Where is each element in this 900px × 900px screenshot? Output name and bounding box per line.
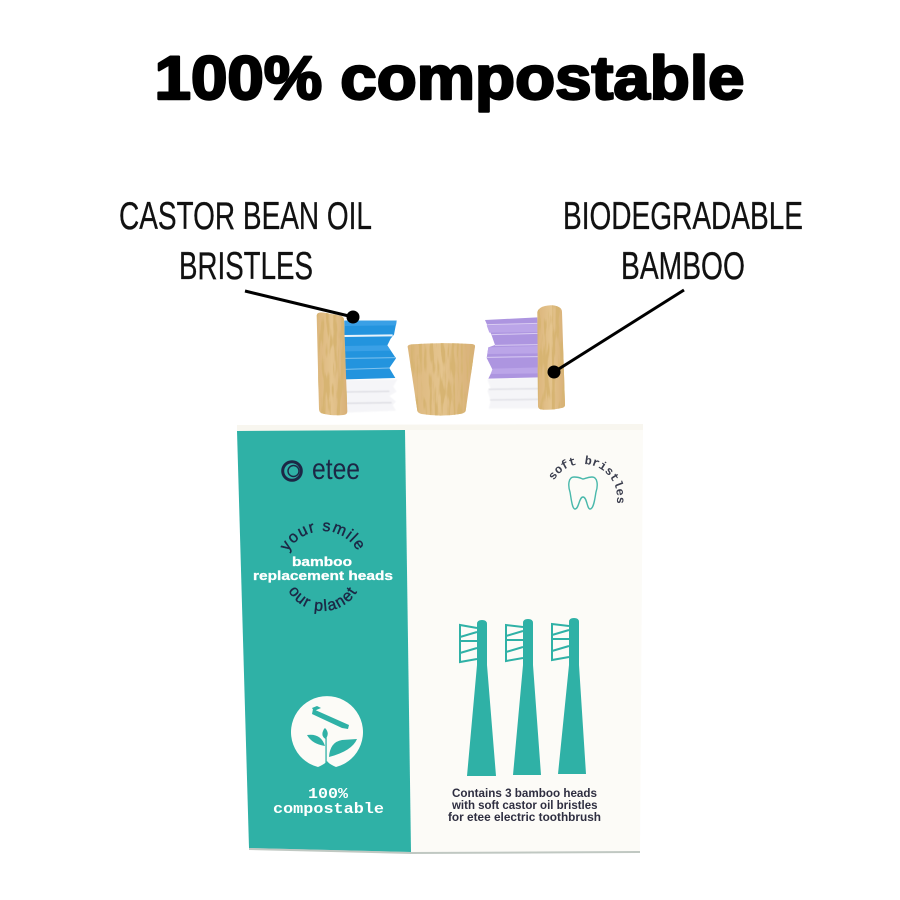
badge: your smile our planet: your smile bbox=[280, 522, 363, 554]
icon: plant bbox=[307, 728, 357, 765]
brush head 2 bbox=[506, 619, 541, 775]
badge: your smile our planet: our planet bbox=[290, 587, 358, 614]
badge: your smile our planet: replacement heads bbox=[253, 568, 393, 583]
label: biodegradable bamboo bbox=[563, 195, 803, 288]
text: contains description: with soft castor oil bristles bbox=[451, 800, 598, 812]
white bristles bbox=[487, 377, 539, 409]
badge: your smile our planet bbox=[253, 522, 393, 614]
icon: compostable circle bbox=[291, 696, 363, 767]
box white panel bbox=[405, 430, 643, 852]
label: castor bean oil bristles: CASTOR BEAN OIL bbox=[119, 195, 372, 238]
bamboo base bbox=[317, 312, 347, 415]
text: contains description bbox=[448, 788, 601, 824]
blue bristles bbox=[344, 321, 397, 379]
arrow: castor bean oil bristles pointer bbox=[245, 291, 360, 324]
text: 100% compostable on box: 100% bbox=[308, 786, 349, 803]
text: contains description: Contains 3 bamboo heads bbox=[452, 788, 597, 800]
purple bristles bbox=[485, 317, 539, 379]
box top surface bbox=[237, 424, 643, 431]
etee logo bbox=[283, 453, 360, 486]
brush head: blue bristles bbox=[317, 312, 397, 415]
bamboo base bbox=[537, 305, 565, 410]
white bristles bbox=[345, 379, 397, 413]
product box bbox=[237, 424, 643, 854]
label: biodegradable bamboo: BAMBOO bbox=[621, 245, 745, 288]
title: 100% compostable bbox=[154, 44, 744, 112]
icon: soft bristles tooth: soft bristles bbox=[550, 455, 624, 504]
label: castor bean oil bristles bbox=[119, 195, 372, 288]
bamboo connector bbox=[408, 343, 475, 416]
brush head 3 bbox=[552, 618, 586, 774]
etee logo: etee bbox=[312, 453, 360, 486]
text: 100% compostable on box: compostable bbox=[273, 801, 384, 818]
text: contains description: for etee electric toothbrush bbox=[448, 812, 601, 824]
label: biodegradable bamboo: BIODEGRADABLE bbox=[563, 195, 803, 238]
brush head: purple bristles bbox=[485, 305, 565, 410]
text: 100% compostable on box bbox=[273, 786, 384, 818]
label: castor bean oil bristles: BRISTLES bbox=[179, 245, 313, 288]
icons: three brush heads bbox=[460, 618, 586, 776]
box teal panel bbox=[237, 430, 411, 852]
brush head 1 bbox=[460, 620, 496, 776]
badge: your smile our planet: bamboo bbox=[292, 554, 352, 569]
icon: toothbrush bbox=[312, 706, 349, 729]
box bottom shadow bbox=[249, 848, 640, 854]
arrow: biodegradable bamboo pointer bbox=[548, 290, 684, 378]
